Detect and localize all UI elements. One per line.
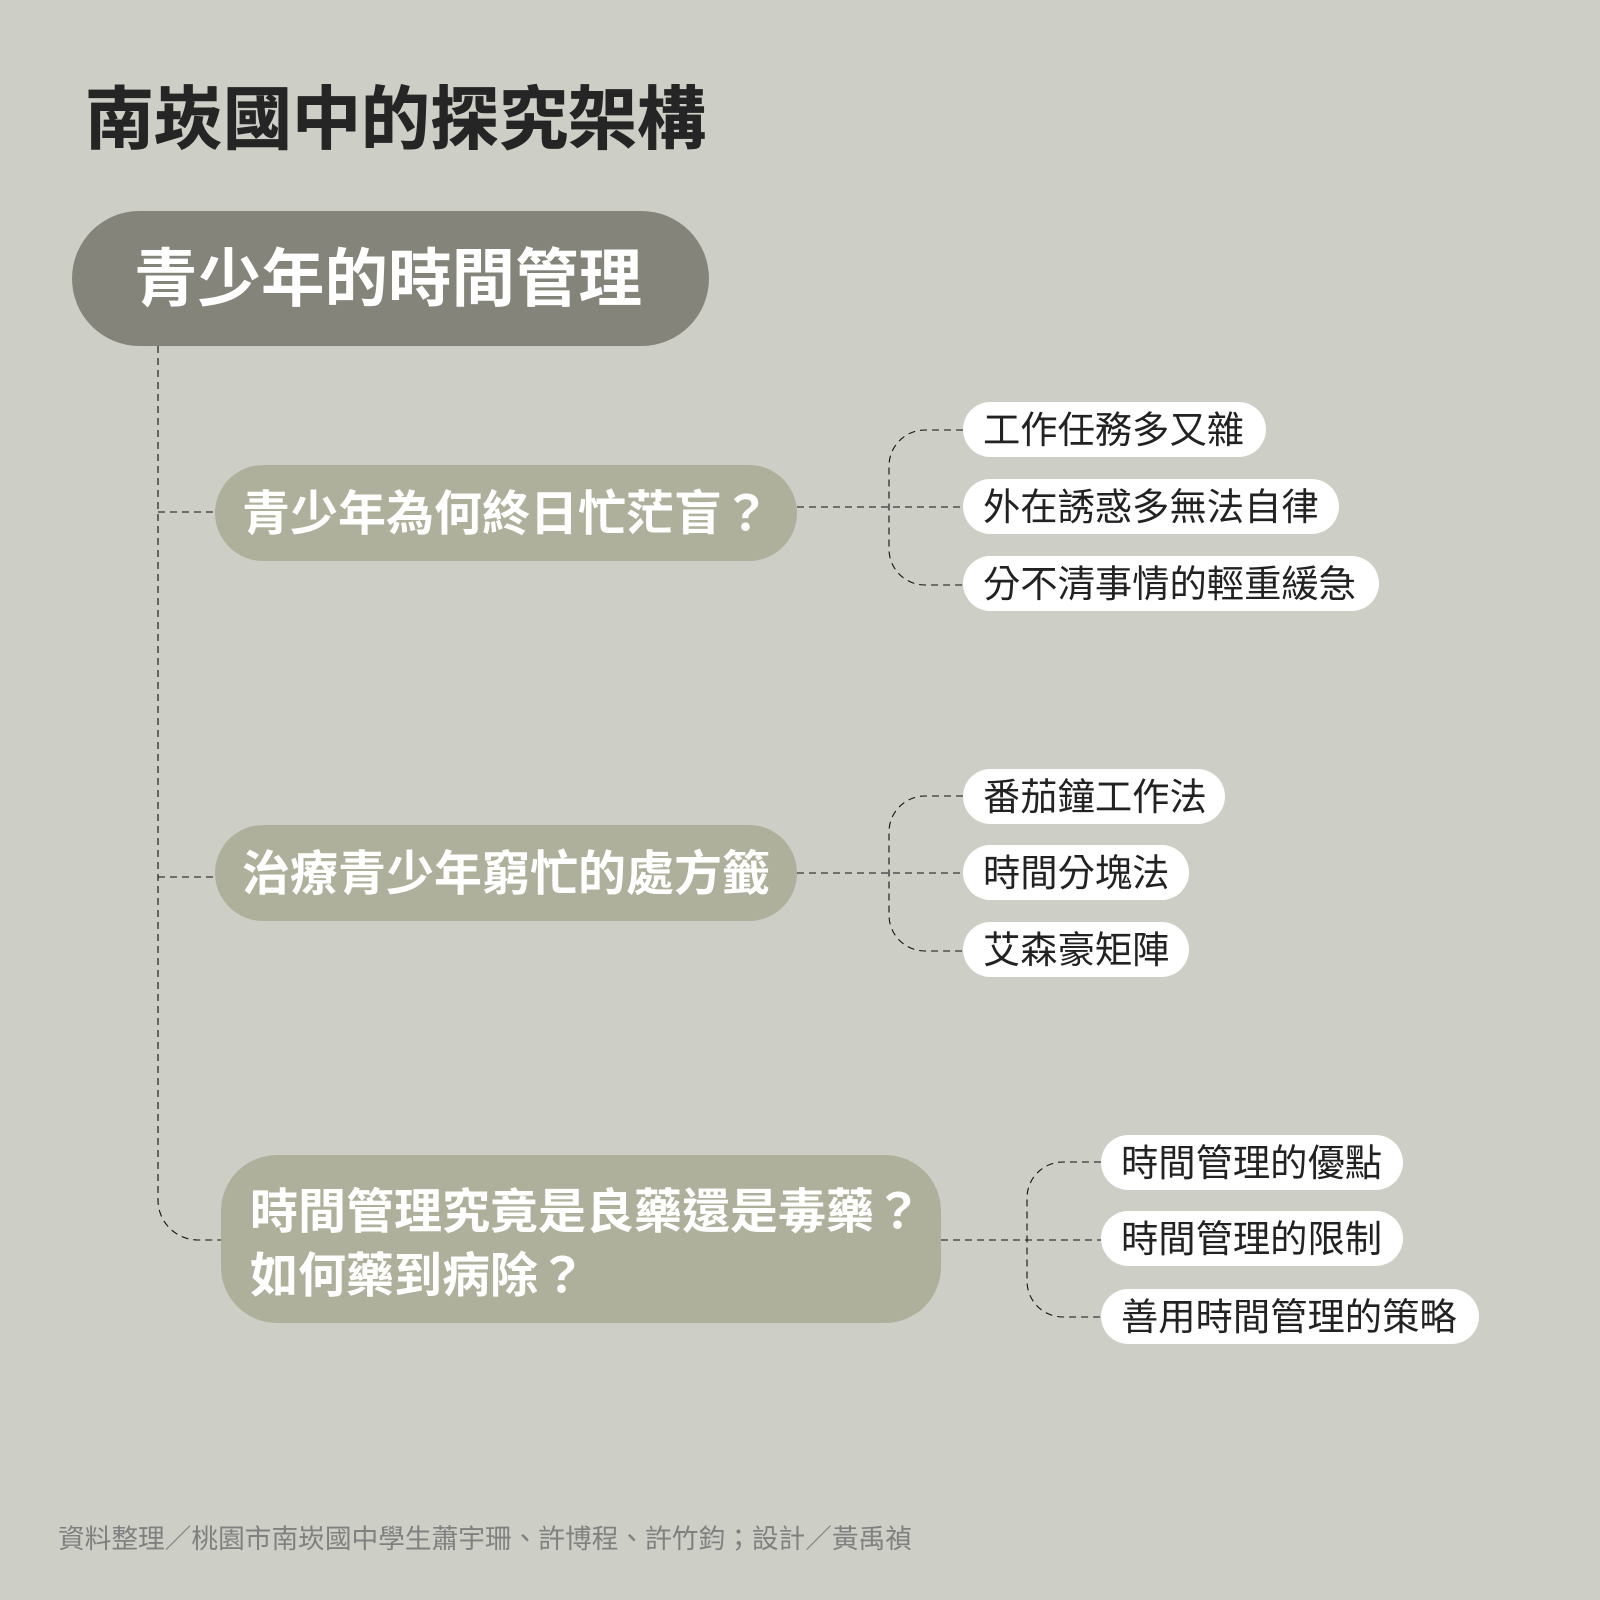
leaf: 善用時間管理的策略 xyxy=(1101,1289,1479,1344)
leaf: 艾森豪矩陣: 艾森豪矩陣 xyxy=(983,929,1169,971)
leaf: 時間分塊法 xyxy=(963,845,1189,900)
branch 2 pill: 治療青少年窮忙的處方籤 xyxy=(242,848,770,901)
leaf: 善用時間管理的策略: 善用時間管理的策略 xyxy=(1121,1296,1457,1338)
leaf: 番茄鐘工作法 xyxy=(963,769,1225,824)
branch 1 pill xyxy=(215,465,797,561)
leaf: 外在誘惑多無法自律 xyxy=(963,479,1339,534)
leaf: 番茄鐘工作法: 番茄鐘工作法 xyxy=(983,776,1207,818)
branch 3 pill: 如何藥到病除？ xyxy=(250,1250,586,1303)
root pill: 青少年的時間管理: 青少年的時間管理 xyxy=(134,245,642,315)
leaf: 外在誘惑多無法自律: 外在誘惑多無法自律 xyxy=(983,486,1319,528)
leaf: 時間管理的限制 xyxy=(1101,1211,1403,1266)
leaf: 時間管理的優點: 時間管理的優點 xyxy=(1121,1142,1382,1184)
branch 1 pill: 青少年為何終日忙茫盲？ xyxy=(242,488,770,541)
leaf: 時間管理的優點 xyxy=(1101,1135,1403,1190)
branch 3 pill: 時間管理究竟是良藥還是毒藥？ xyxy=(250,1186,922,1239)
root pill: 青少年的時間管理 xyxy=(72,211,709,346)
branch 3 pill xyxy=(221,1155,941,1323)
leaf: 工作任務多又雜: 工作任務多又雜 xyxy=(983,409,1244,451)
footer credit: 資料整理／桃園市南崁國中學生蕭宇珊、許博程、許竹鈞；設計／黃禹禎 xyxy=(58,1524,912,1554)
leaf: 工作任務多又雜 xyxy=(963,402,1266,457)
branch 2 pill xyxy=(215,825,797,921)
leaf: 分不清事情的輕重緩急: 分不清事情的輕重緩急 xyxy=(983,563,1356,605)
leaf: 時間管理的限制: 時間管理的限制 xyxy=(1121,1218,1382,1260)
leaf: 分不清事情的輕重緩急 xyxy=(963,556,1379,611)
leaf: 艾森豪矩陣 xyxy=(963,922,1189,977)
title: 南崁國中的探究架構 xyxy=(85,81,706,158)
leaf: 時間分塊法: 時間分塊法 xyxy=(983,852,1169,894)
